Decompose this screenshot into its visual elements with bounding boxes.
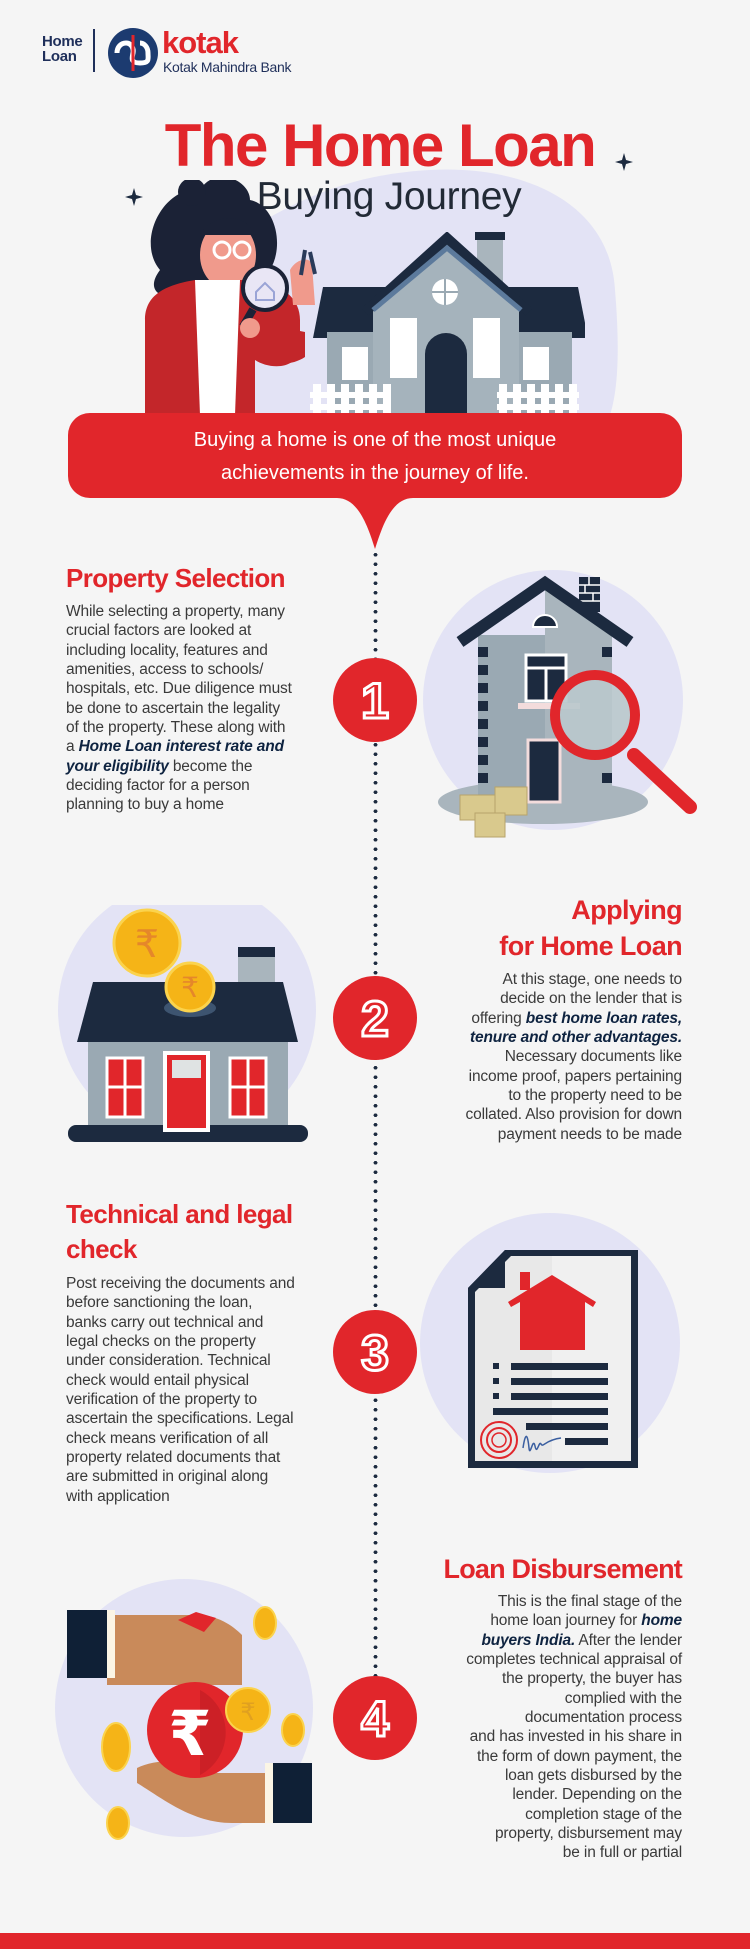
body text: amenities, access to schools/: [66, 661, 263, 678]
body text: check means verification of all: [66, 1430, 268, 1447]
body text: collated. Also provision for down: [466, 1106, 682, 1123]
body text: be done to ascertain the legality: [66, 700, 280, 717]
body text: offering best home loan rates,: [471, 1010, 682, 1027]
step 1 number: [333, 658, 417, 742]
heading: [66, 1199, 293, 1264]
section 3: technical and legal check: [66, 1199, 295, 1505]
text: home loan: Loan: [42, 48, 77, 65]
step 1 number: 1: [361, 673, 389, 729]
body text: Necessary documents like: [505, 1048, 682, 1065]
body text: check would entail physical: [66, 1372, 249, 1389]
body text: payment needs to be made: [498, 1126, 682, 1143]
body text: [466, 971, 682, 1143]
banner text: Buying a home is one of the most unique: [194, 429, 556, 451]
body text: completion stage of the: [525, 1806, 682, 1823]
body text: hospitals, etc. Due diligence must: [66, 680, 292, 697]
body text: a Home Loan interest rate and: [66, 738, 284, 755]
title line 1: The Home Loan: [165, 112, 595, 179]
body text: verification of the property to: [66, 1391, 257, 1408]
text: home loan: [42, 33, 82, 65]
body text: lender. Depending on the: [512, 1786, 682, 1803]
body text: the property, the buyer has: [502, 1670, 682, 1687]
body text: banks carry out technical and: [66, 1314, 263, 1331]
icon: kotak logo: [108, 28, 158, 78]
banner: intro callout: [68, 413, 682, 549]
body text: property, disbursement may: [495, 1825, 682, 1842]
body text: including locality, features and: [66, 642, 268, 659]
illustration: house with magnifier: [423, 570, 697, 838]
section 2: applying for home loan: [466, 895, 682, 1143]
body text: the form of down payment, the: [477, 1748, 682, 1765]
background blob: [255, 170, 618, 413]
heading: Technical and legal: [66, 1199, 293, 1229]
illustration: woman with magnifier: [144, 180, 317, 413]
body text: income proof, papers pertaining: [469, 1068, 682, 1085]
banner text: [194, 429, 556, 484]
heading: Loan Disbursement: [444, 1554, 682, 1584]
illustration: hands with money bag: [55, 1579, 313, 1840]
body text: under consideration. Technical: [66, 1352, 271, 1369]
banner text: achievements in the journey of life.: [221, 462, 529, 484]
illustration: main house: [310, 232, 585, 413]
body text: completes technical appraisal of: [466, 1651, 682, 1668]
step 3 number: [333, 1310, 417, 1394]
heading: Property Selection: [66, 563, 285, 593]
footer bar: [0, 1933, 750, 1949]
section 1: property selection: [65, 563, 292, 813]
body text: This is the final stage of the: [498, 1593, 682, 1610]
text: kotak: kotak: [162, 25, 238, 60]
body text: deciding factor for a person: [66, 777, 250, 794]
illustration: legal document: [420, 1213, 680, 1473]
body text: of the property. These along with: [66, 719, 285, 736]
body text: before sanctioning the loan,: [66, 1294, 252, 1311]
icon: stars: [125, 153, 633, 206]
step 2 number: 2: [361, 991, 389, 1047]
body text: loan gets disbursed by the: [505, 1767, 682, 1784]
body text: to the property need to be: [508, 1087, 682, 1104]
step 2 number: [333, 976, 417, 1060]
step 4 number: 4: [361, 1691, 389, 1747]
heading: Applying: [571, 895, 682, 925]
heading: check: [66, 1234, 137, 1264]
body text: buyers India. After the lender: [481, 1632, 682, 1649]
body text: documentation process: [525, 1709, 682, 1726]
body text: At this stage, one needs to: [502, 971, 682, 988]
text: Kotak Mahindra Bank: Kotak Mahindra Bank: [163, 59, 291, 75]
body text: [466, 1593, 682, 1861]
body text: planning to buy a home: [66, 796, 224, 813]
body text: legal checks on the property: [66, 1333, 256, 1350]
illustration: house with coins: ₹: [181, 971, 199, 1004]
body text: are submitted in original along: [66, 1468, 268, 1485]
body text: Post receiving the documents and: [66, 1275, 295, 1292]
step 4 number: [333, 1676, 417, 1760]
body text: property related documents that: [66, 1449, 280, 1466]
body text: home loan journey for home: [490, 1612, 682, 1629]
illustration: house with coins: [58, 905, 316, 1142]
illustration: house with coins: ₹: [135, 922, 159, 966]
step 3 number: 3: [361, 1325, 389, 1381]
title: [165, 112, 595, 218]
title line 2: Buying Journey: [257, 175, 521, 218]
section 4: loan disbursement: [444, 1554, 682, 1861]
body text: ascertain the specifications. Legal: [66, 1410, 293, 1427]
body text: crucial factors are looked at: [66, 622, 251, 639]
body text: and has invested in his share in: [470, 1728, 682, 1745]
body text: decide on the lender that is: [500, 990, 682, 1007]
body text: While selecting a property, many: [66, 603, 285, 620]
logo: home loan kotak: [42, 25, 292, 78]
body text: complied with the: [565, 1690, 682, 1707]
illustration: hands with money bag: ₹: [240, 1698, 256, 1726]
body text: [65, 603, 292, 813]
heading: [499, 895, 682, 961]
body text: tenure and other advantages.: [470, 1029, 682, 1046]
body text: be in full or partial: [563, 1844, 682, 1861]
dotted timeline: [373, 550, 378, 1680]
illustration: hands with money bag: ₹: [168, 1697, 212, 1770]
body text: [66, 1275, 295, 1505]
body text: your eligibility become the: [66, 758, 252, 775]
body text: with application: [66, 1488, 170, 1505]
heading: for Home Loan: [499, 931, 682, 961]
text: home loan: Home: [42, 33, 82, 50]
